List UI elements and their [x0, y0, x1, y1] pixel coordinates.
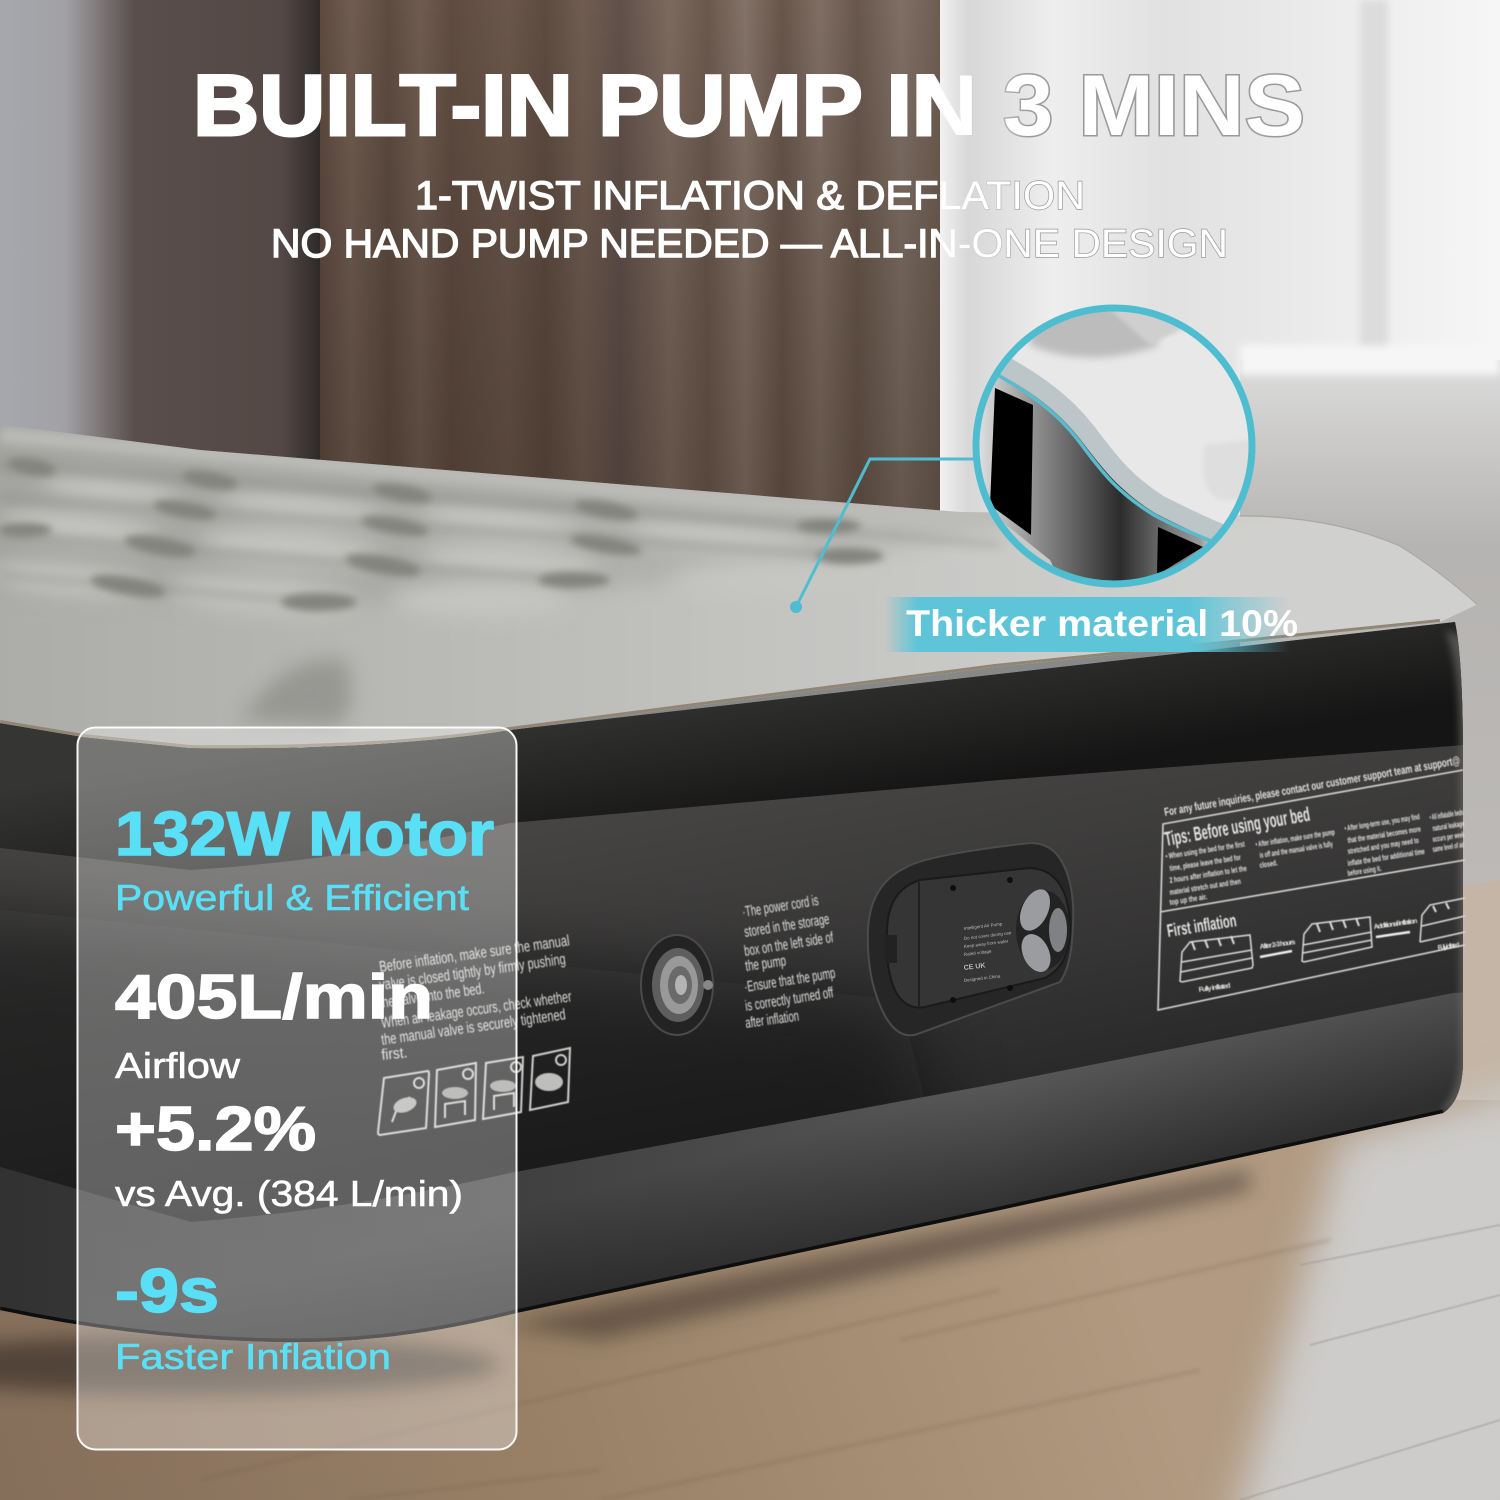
- printed instructions: tips and first inflation: time, please leave the bed for: [1169, 853, 1241, 873]
- printed instructions: tips and first inflation: occurs per week: [1432, 830, 1465, 844]
- printed instructions: tips and first inflation: • After inflation, make sure the pump: [1255, 828, 1335, 849]
- printed instructions: tips and first inflation: After 2-3 hours: [1259, 939, 1296, 951]
- printed instructions: tips and first inflation: top up the air.: [1169, 892, 1208, 907]
- built-in pump control panel: Do not cover during use: [964, 930, 1012, 941]
- printed instructions: tips and first inflation: • After long-term use, you may find: [1344, 812, 1420, 833]
- heading: 3 MINS: [1003, 58, 1305, 154]
- printed note beside pump: box on the left side of: [743, 929, 835, 960]
- heading: BUILT-IN PUMP IN: [193, 58, 978, 154]
- printed note beside pump: after inflation: [744, 1008, 800, 1032]
- subheading: 1-TWIST INFLATION & DEFLATION: [415, 174, 1085, 218]
- air mattress body: [0, 420, 1500, 1400]
- printed manual valve instructions and warning icons: When air leakage occurs, check whether: [380, 988, 573, 1032]
- printed manual valve instructions and warning icons: Before inflation, make sure the manual: [378, 932, 571, 976]
- printed manual valve instructions and warning icons: valve is closed tightly by firmly pushing: [378, 951, 567, 994]
- dark side wall: [0, 622, 1463, 1342]
- printed instructions: tips and first inflation: Additional inflation: [1373, 918, 1418, 931]
- printed manual valve instructions and warning icons: the manual valve is securely tightened: [380, 1006, 567, 1049]
- built-in pump control panel: [868, 843, 1073, 1035]
- printed instructions: tips and first inflation: closed.: [1259, 858, 1278, 870]
- printed instructions: tips and first inflation: inflate the bed for additional time: [1347, 847, 1426, 868]
- subheading: NO HAND PUMP NEEDED — ALL-IN-ONE DESIGN: [271, 222, 1228, 266]
- spec: airflow comparison: vs Avg. (384 L/min): [115, 1173, 463, 1214]
- panel: motor specs: [78, 728, 516, 1450]
- built-in pump control panel: Intelligent Air Pump: [964, 921, 1003, 931]
- spec: airflow comparison: +5.2%: [115, 1095, 316, 1164]
- printed note beside pump: [741, 892, 836, 1032]
- printed instructions: tips and first inflation: is off and the manual valve is fully: [1259, 839, 1334, 860]
- spec: airflow: 405L/min: [115, 963, 433, 1032]
- callout: material cross-section magnifier: Thicker material 10%: [906, 603, 1298, 644]
- printed instructions: tips and first inflation: that the material becomes more: [1347, 824, 1422, 845]
- printed manual valve instructions and warning icons: first.: [381, 1044, 408, 1064]
- subheading: [271, 174, 1228, 266]
- printed instructions: tips and first inflation: Fully inflated: [1198, 983, 1231, 994]
- spec: inflation time: [115, 1257, 391, 1377]
- spec: motor power: Powerful & Efficient: [115, 877, 469, 918]
- printed note beside pump: the pump: [744, 952, 787, 975]
- heading: [193, 58, 1305, 154]
- callout: material cross-section magnifier: [790, 300, 1298, 652]
- built-in pump control panel: Keep away from water: [964, 939, 1009, 949]
- built-in pump control panel: CE UK: [963, 962, 986, 972]
- built-in pump control panel: Rated voltage: [964, 949, 992, 957]
- spec: airflow: Airflow: [115, 1045, 241, 1086]
- printed instructions: tips and first inflation: 2 hours after inflation to let the: [1169, 864, 1248, 885]
- spec: motor power: [115, 800, 494, 918]
- printed note beside pump: ·The power cord is: [741, 892, 820, 921]
- printed instructions: tips and first inflation: before using it.: [1347, 864, 1382, 878]
- printed note beside pump: ·Ensure that the pump: [743, 965, 836, 996]
- printed manual valve instructions and warning icons: [378, 932, 573, 1135]
- callout label bar: [885, 597, 1290, 652]
- spec: airflow: [115, 963, 433, 1086]
- printed instructions: tips and first inflation: [1158, 755, 1465, 1010]
- magnified cross-section: [986, 312, 1248, 580]
- printed manual valve instructions and warning icons: the valve into the bed.: [378, 980, 486, 1012]
- built-in pump control panel: Designed in China: [964, 973, 1001, 983]
- flocked top surface: [0, 428, 1478, 748]
- spec: inflation time: Faster Inflation: [115, 1336, 391, 1377]
- leader line: [790, 459, 976, 613]
- printed note beside pump: stored in the storage: [743, 911, 831, 941]
- printed instructions: tips and first inflation: stretched and you may need to: [1347, 836, 1419, 856]
- spec: inflation time: -9s: [115, 1257, 219, 1326]
- spec: airflow comparison: [115, 1095, 463, 1214]
- printed instructions: tips and first inflation: • When using the bed for the first: [1165, 840, 1246, 861]
- spec: motor power: 132W Motor: [115, 800, 494, 869]
- printed note beside pump: is correctly turned off: [744, 984, 835, 1015]
- valve on side of mattress: [641, 935, 713, 1035]
- printed instructions: tips and first inflation: same level of air: [1432, 840, 1465, 854]
- printed instructions: tips and first inflation: material stretch out and then: [1169, 877, 1241, 897]
- printed instructions: tips and first inflation: Tips: Before using your bed: [1163, 804, 1312, 851]
- printed instructions: tips and first inflation: natural leakage: [1432, 819, 1465, 833]
- printed instructions: tips and first inflation: First inflation: [1165, 910, 1238, 941]
- printed instructions: tips and first inflation: Fully inflated: [1437, 942, 1460, 952]
